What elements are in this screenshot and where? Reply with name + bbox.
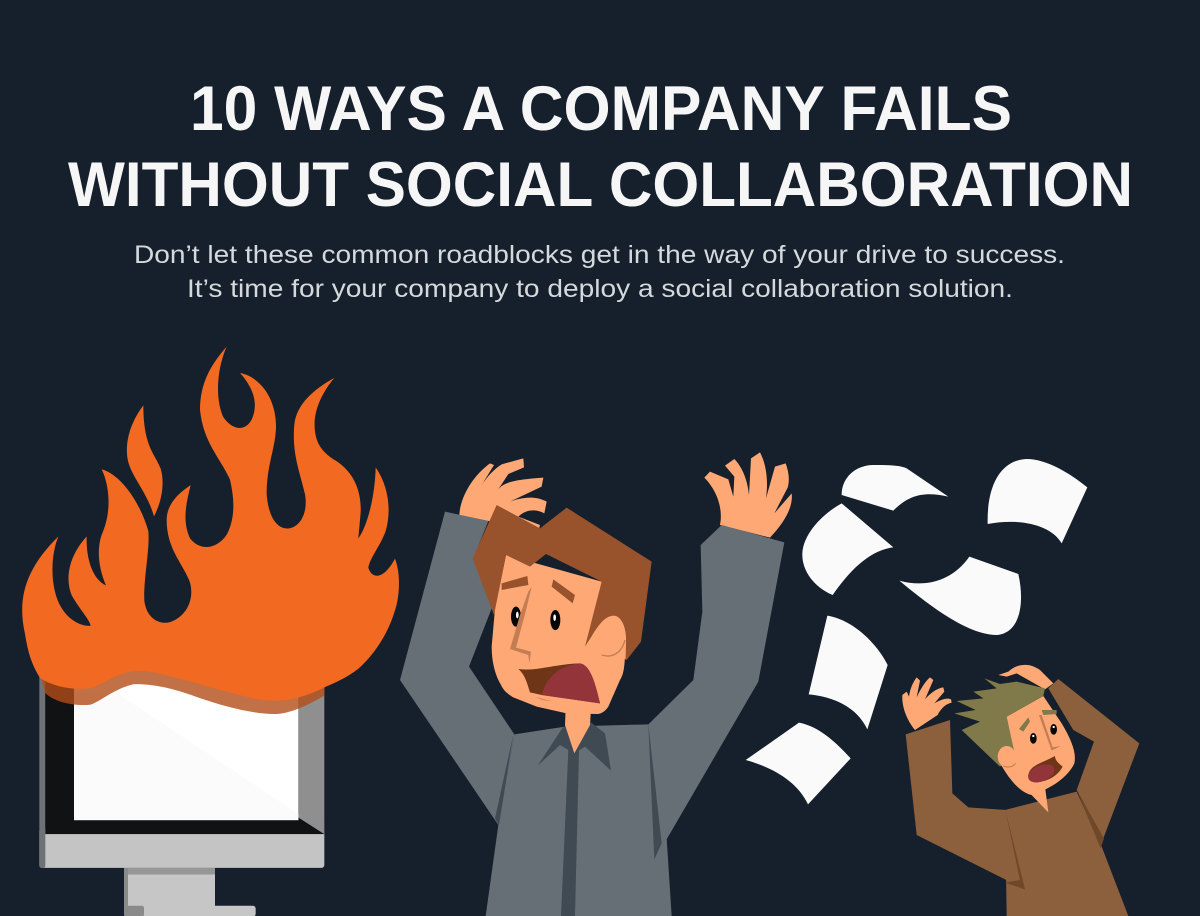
nose — [510, 587, 532, 663]
face — [492, 555, 625, 714]
eyebrows — [1019, 710, 1057, 732]
monitor screen — [74, 671, 298, 820]
face — [998, 696, 1075, 795]
jacket folds — [1005, 792, 1104, 889]
nose — [1039, 715, 1061, 751]
hand on head — [998, 665, 1053, 689]
eyebrows — [502, 576, 575, 603]
flame shadow — [39, 671, 324, 714]
paper 6 — [746, 723, 851, 804]
ear — [998, 746, 1016, 767]
paper 5 — [809, 616, 888, 729]
neck — [565, 708, 591, 753]
paper 1 — [842, 465, 948, 511]
subtitle: Don’t let these common roadblocks get in the way of your drive to success. — [134, 241, 1065, 269]
monitor stand — [124, 868, 256, 916]
head — [954, 678, 1075, 812]
subtitle — [134, 241, 1065, 303]
flying papers — [746, 459, 1087, 804]
right hand — [704, 452, 792, 538]
shirt folds, placket and collar — [495, 722, 662, 916]
raised hand — [902, 677, 952, 730]
mouth — [518, 663, 600, 703]
large panicking man — [400, 452, 792, 916]
left hand — [459, 458, 547, 529]
small panicking man — [902, 665, 1139, 916]
paper 3 — [802, 503, 893, 595]
small detached flame — [127, 405, 163, 516]
eyes — [1030, 724, 1057, 744]
paper 2 — [988, 459, 1087, 543]
jacket — [906, 679, 1139, 916]
shirt — [400, 512, 784, 916]
eyes — [511, 607, 560, 630]
title — [68, 74, 1133, 220]
neck — [1030, 787, 1048, 812]
title: 10 WAYS A COMPANY FAILS — [190, 74, 1012, 144]
title: WITHOUT SOCIAL COLLABORATION — [68, 150, 1133, 220]
ear — [585, 616, 626, 672]
subtitle: It’s time for your company to deploy a social collaboration solution. — [187, 275, 1013, 303]
hair — [954, 678, 1045, 767]
hair — [473, 505, 652, 660]
burning monitor illustration — [22, 347, 399, 916]
paper 4 — [899, 557, 1021, 635]
mouth — [1028, 756, 1063, 782]
flames — [22, 347, 399, 701]
monitor body — [39, 671, 324, 868]
